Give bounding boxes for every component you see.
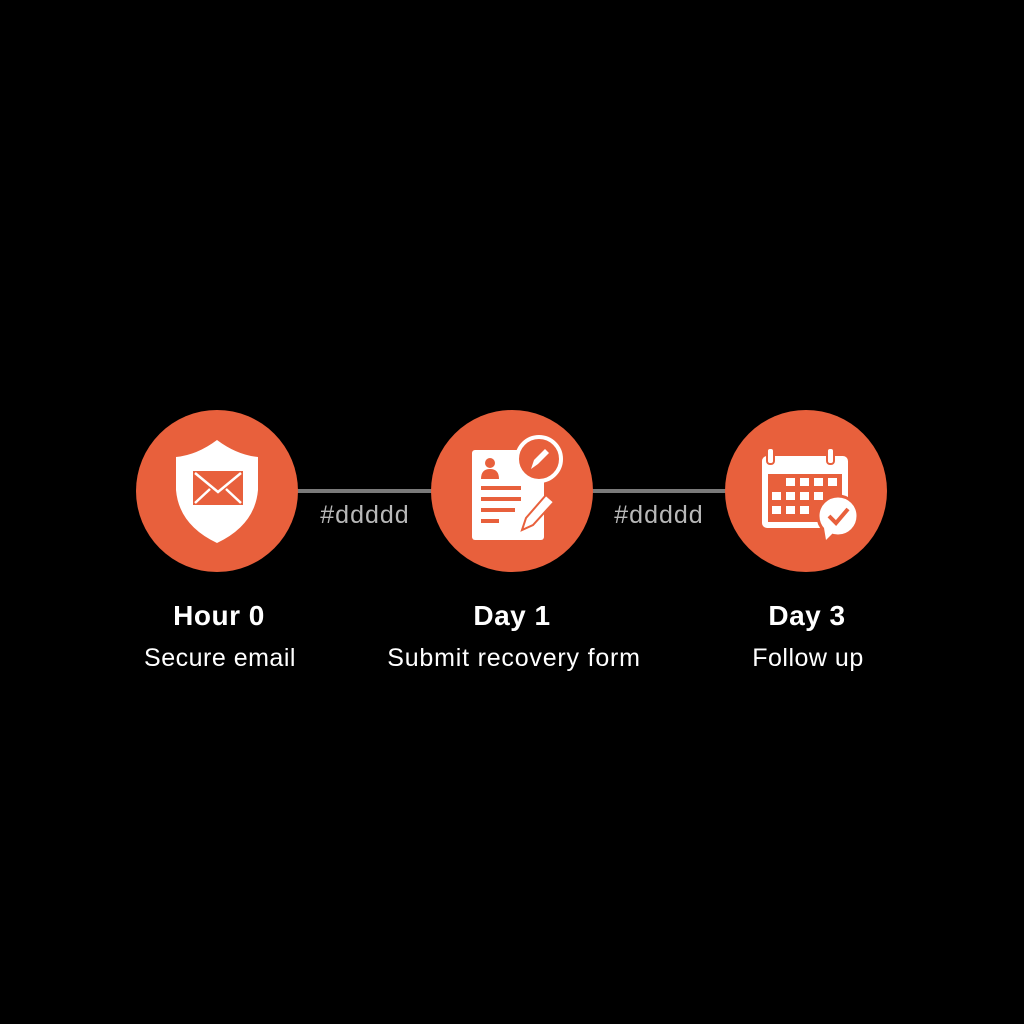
label: Day 1: Day 1 [473, 600, 551, 631]
label: Day 3: Day 3 [768, 600, 846, 631]
icon: calendar with check [725, 410, 887, 572]
connector line 1: #ddddd [320, 501, 410, 529]
step 2: Day 1 [387, 410, 641, 672]
step 3: Day 3 [725, 410, 887, 672]
connector line 1 [296, 489, 434, 529]
connector line 2 [591, 489, 728, 529]
label: Hour 0: Hour 0 [173, 600, 265, 631]
connector line 2: #ddddd [614, 501, 704, 529]
text: Secure email: Secure email [144, 644, 296, 672]
step 1: Hour 0 [136, 410, 298, 672]
text: Follow up: Follow up [752, 644, 864, 672]
icon: form with pencil [431, 410, 593, 572]
text: Submit recovery form: Submit recovery form [387, 644, 641, 672]
icon: shield with envelope [136, 410, 298, 572]
